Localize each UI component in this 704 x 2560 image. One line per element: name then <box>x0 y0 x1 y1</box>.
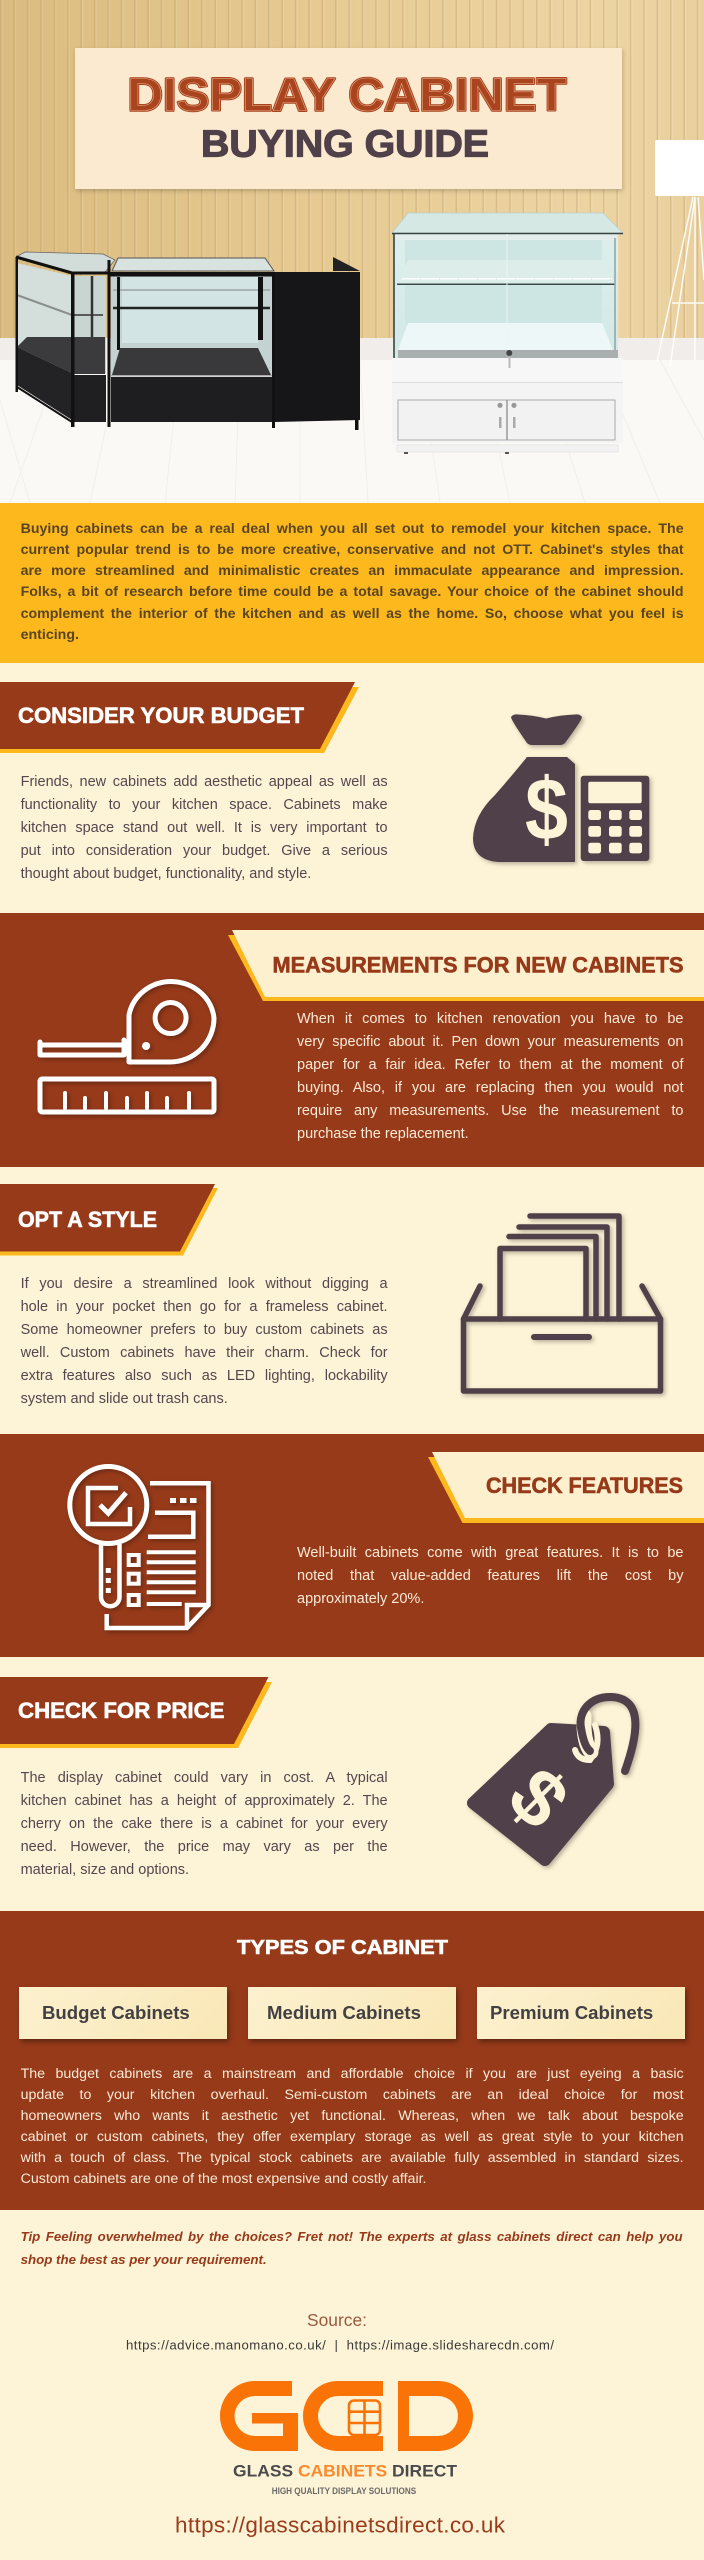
measurements text: require any measurements. Use the measurement to <box>297 1103 684 1119</box>
title banner <box>75 48 622 189</box>
panel: measurements for new cabinets <box>0 913 704 1167</box>
types text <box>20 2066 684 2187</box>
style text: system and slide out trash cans. <box>21 1391 228 1407</box>
panel: consider your budget <box>0 663 704 913</box>
panel: footer <box>20 2229 683 2538</box>
measurements text: When it comes to kitchen renovation you have to be <box>297 1011 684 1027</box>
style text <box>20 1276 388 1407</box>
panel: check features <box>0 1434 704 1657</box>
heading: consider your budget: CONSIDER YOUR BUDGET <box>18 703 305 728</box>
black display cabinet <box>16 252 360 430</box>
style text: If you desire a streamlined look without digging a <box>21 1276 388 1292</box>
card: budget cabinets <box>19 1987 227 2038</box>
heading: consider your budget <box>0 682 359 753</box>
measurements text <box>297 1011 684 1142</box>
budget text: thought about budget, functionality, and style. <box>21 866 311 882</box>
icon: file drawer <box>460 1212 668 1398</box>
icon: money bag and calculator: $ <box>525 760 568 858</box>
heading: check for price: CHECK FOR PRICE <box>18 1698 225 1723</box>
intro text: are more streamlined and minimalistic creates an immaculate appearance and impression. <box>21 563 684 579</box>
types text: homeowners who wants it aesthetic yet functional. Whereas, when we talk about bespoke <box>21 2108 684 2124</box>
panel: opt a style <box>0 1167 704 1434</box>
budget text <box>20 774 388 882</box>
style text: well. Custom cabinets have their charm. Check for <box>21 1345 388 1361</box>
budget text: kitchen space stand out well. It is very important to <box>21 820 388 836</box>
tip text: Tip Feeling overwhelmed by the choices? Fret not! The experts at glass cabinets direct can help you <box>21 2229 683 2244</box>
source credits and logo <box>126 2310 554 2538</box>
price text: material, size and options. <box>21 1862 189 1878</box>
price text: kitchen cabinet has a height of approximately 2. The <box>21 1793 388 1809</box>
style text: hole in your pocket then go for a frameless cabinet. <box>21 1299 388 1315</box>
intro text: Folks, a bit of research before time could be a total savage. Your choice of the cabinet should <box>21 584 684 600</box>
heading: check features: CHECK FEATURES <box>486 1473 683 1498</box>
intro text: current popular trend is to be more creative, conservative and not OTT. Cabinet's styles that <box>21 542 684 558</box>
logo tagline: HIGH QUALITY DISPLAY SOLUTIONS <box>272 2485 416 2496</box>
features text: noted that value-added features lift the cost by <box>297 1568 684 1584</box>
icon: money bag and calculator <box>472 714 654 866</box>
heading: check for price <box>0 1677 272 1748</box>
style text: extra features also such as LED lighting, lockability <box>21 1368 388 1384</box>
website url: https://glasscabinetsdirect.co.uk <box>175 2513 506 2538</box>
icon: price tag <box>467 1692 644 1870</box>
budget text: put into consideration your budget. Give a serious <box>21 843 388 859</box>
heading: opt a style: OPT A STYLE <box>18 1207 157 1232</box>
intro panel <box>0 503 704 663</box>
heading: measurements for new cabinets <box>228 930 704 1001</box>
hero photo with title banner <box>0 0 704 503</box>
icon: price tag: $ <box>491 1751 586 1845</box>
features text: approximately 20%. <box>297 1591 424 1607</box>
tip text <box>20 2229 683 2266</box>
card: budget cabinets: Budget Cabinets <box>42 2002 190 2023</box>
heading: measurements for new cabinets: MEASUREMENTS FOR NEW CABINETS <box>272 952 684 978</box>
panel: types of cabinet <box>0 1910 704 2210</box>
intro text: enticing. <box>21 627 79 643</box>
budget text: Friends, new cabinets add aesthetic appeal as well as <box>21 774 388 790</box>
features text <box>297 1545 684 1607</box>
price text: need. However, the price may vary as per the <box>21 1839 388 1855</box>
source label: Source: <box>307 2310 367 2330</box>
subtitle: buying guide: BUYING GUIDE <box>201 124 489 166</box>
card: premium cabinets: Premium Cabinets <box>490 2002 653 2023</box>
style text: Some homeowner prefers to buy custom cabinets as <box>21 1322 388 1338</box>
card: medium cabinets: Medium Cabinets <box>267 2002 421 2023</box>
price text <box>20 1770 388 1878</box>
heading: types of cabinet: TYPES OF CABINET <box>237 1936 449 1958</box>
icon: magnifier over checklist document <box>67 1464 214 1634</box>
heading: opt a style <box>0 1184 218 1256</box>
title: display cabinet: DISPLAY CABINET <box>128 68 566 120</box>
source urls: https://advice.manomano.co.uk/ | https://image.slidesharecdn.com/ <box>126 2338 554 2352</box>
icon: tape measure and ruler <box>38 979 220 1118</box>
logo: GCD <box>220 2381 473 2451</box>
budget text: functionality to your kitchen space. Cabinets make <box>21 797 388 813</box>
price text: The display cabinet could vary in cost. A typical <box>21 1770 388 1786</box>
title: display cabinet: DISPLAY CABINET <box>128 68 566 120</box>
measurements text: very specific about it. Pen down your measurements on <box>297 1034 684 1050</box>
intro text <box>21 521 684 643</box>
card: premium cabinets <box>477 1987 685 2038</box>
types text: The budget cabinets are a mainstream and affordable choice if you are just eyeing a basic <box>21 2066 684 2082</box>
measurements text: paper for a fair idea. Refer to them at the moment of <box>297 1057 684 1073</box>
types text: with a touch of class. The typical stock cabinets are available fully assembled in standard sizes. <box>21 2150 684 2166</box>
floor lamp <box>655 140 704 367</box>
measurements text: purchase the replacement. <box>297 1126 469 1142</box>
tip text: shop the best as per your requirement. <box>21 2252 267 2266</box>
panel: check for price <box>0 1657 704 1910</box>
white glass display cabinet <box>392 213 623 454</box>
card: medium cabinets <box>248 1987 456 2038</box>
types text: cabinet or custom cabinets, they offer exemplary storage as well as great style to your kitchen <box>21 2129 684 2145</box>
intro text: Buying cabinets can be a real deal when you all set out to remodel your kitchen space. The <box>21 521 684 537</box>
measurements text: buying. Also, if you are replacing then you would not <box>297 1080 684 1096</box>
logo wordmark: GLASS CABINETS DIRECT <box>233 2462 458 2481</box>
heading: check features <box>428 1452 704 1523</box>
types text: Custom cabinets are one of the most expensive and costly affair. <box>21 2171 426 2187</box>
price text: cherry on the cake there is a cabinet for your every <box>21 1816 388 1832</box>
features text: Well-built cabinets come with great features. It is to be <box>297 1545 684 1561</box>
intro text: complement the interior of the kitchen and as well as the home. So, choose what you feel is <box>21 606 684 622</box>
types text: update to your kitchen overhaul. Semi-custom cabinets are an ideal choice for most <box>21 2087 684 2103</box>
